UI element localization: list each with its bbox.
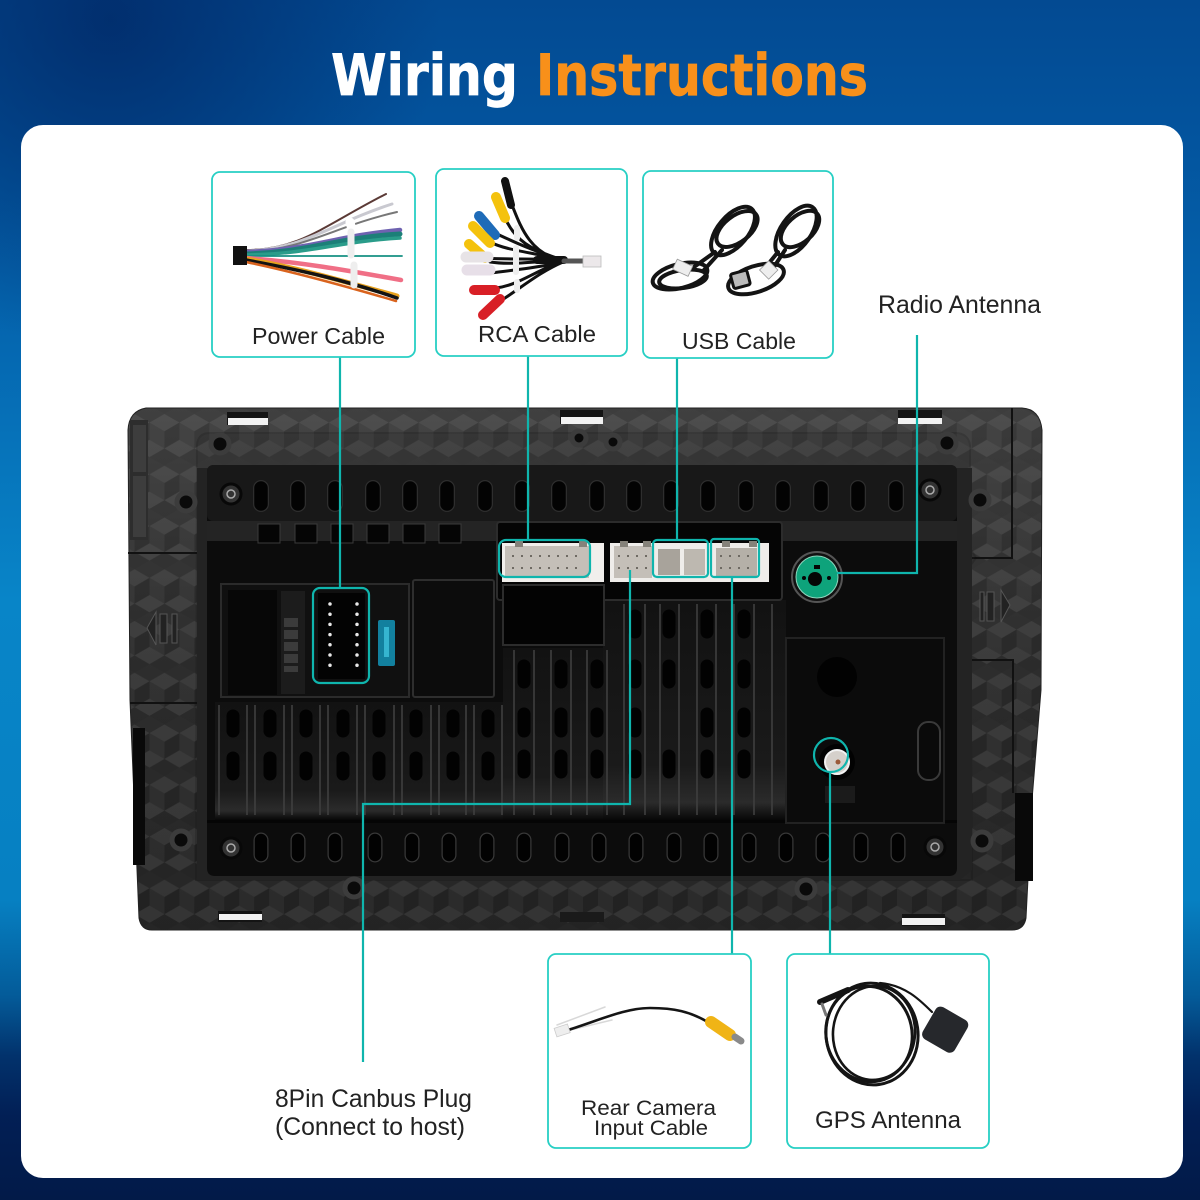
connector bay: [497, 522, 782, 645]
label: radio antenna: Radio Antenna: [878, 291, 1041, 319]
label: Power Cable: [252, 323, 385, 349]
inner frame: [196, 433, 976, 880]
icon: GPS antenna: [817, 977, 932, 1091]
lower vent bands: [207, 600, 957, 855]
small tab row: [258, 524, 461, 543]
title: Wiring: [331, 43, 518, 109]
icon: rear camera cable: [557, 1007, 741, 1041]
label: Input Cable: [594, 1117, 708, 1140]
label: 8pin canbus plug: (Connect to host): [275, 1113, 465, 1141]
panel: GPS antenna: [787, 954, 989, 1148]
mounting slots: [218, 410, 945, 926]
device: radio back housing: [128, 408, 1042, 930]
title: Instructions: [536, 43, 868, 109]
mounting holes and screws: [172, 431, 991, 898]
title: [331, 43, 868, 109]
radio antenna socket: [792, 552, 842, 602]
label: 8pin canbus plug: 8Pin Canbus Plug: [275, 1085, 472, 1113]
label: 8pin canbus plug: [275, 1085, 472, 1141]
label: Rear Camera: [581, 1097, 716, 1120]
GPS socket and hole: [817, 657, 940, 803]
white wiring connectors: [502, 541, 769, 582]
panel: RCA cable: [436, 169, 627, 356]
housing shell: [128, 408, 1042, 930]
label: USB Cable: [682, 328, 796, 354]
icon: USB cable coils: [650, 199, 826, 300]
label: [581, 1097, 716, 1140]
icon: RCA harness: [466, 181, 585, 315]
left connector block: [221, 580, 494, 697]
top vent row: [261, 488, 896, 504]
label: GPS Antenna: [815, 1107, 962, 1134]
label: RCA Cable: [478, 321, 596, 347]
panel: power cable: [212, 172, 415, 357]
callout lines: [313, 335, 917, 1062]
panel: USB cable: [643, 171, 833, 358]
panel: rear camera input cable: [548, 954, 751, 1148]
icon: power cable harness: [246, 194, 402, 301]
